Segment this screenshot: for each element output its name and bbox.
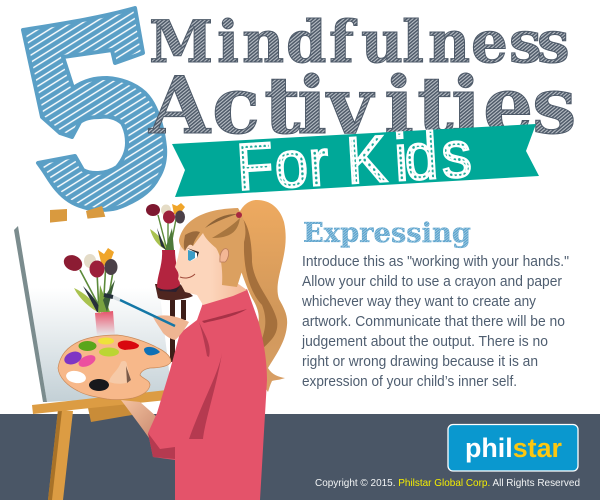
body text: artwork. Communicate that there will be no: [302, 314, 565, 330]
shirt: [148, 289, 267, 500]
paintbrush: [104, 295, 175, 326]
canvas on easel: [14, 212, 172, 402]
ear: [220, 249, 229, 262]
easel frame: [32, 390, 167, 500]
dark footer band: [0, 414, 600, 500]
logo: philstar: philstar: [465, 433, 562, 463]
body text: right or wrong drawing because it is an: [302, 354, 538, 370]
face and neck: [175, 230, 247, 305]
painted tulips on canvas: [61, 248, 118, 336]
big number 5: [23, 8, 165, 210]
copyright line: Copyright © 2015. Philstar Global Corp. All Rights Reserved: [315, 477, 580, 489]
logo: philstar: [448, 424, 578, 471]
painting hand: [153, 315, 189, 340]
side table: [155, 284, 193, 362]
ponytail: [238, 200, 287, 392]
title: Mindfulness: Mindfulness: [149, 8, 570, 76]
ribbon banner: For Kids: For Kids: [235, 118, 473, 205]
body text: whichever way they want to create any: [301, 294, 537, 310]
paint palette: [58, 335, 171, 400]
arm holding palette: [121, 400, 157, 438]
ribbon banner: For Kids: [172, 118, 539, 205]
body text: expression of your child’s inner self.: [302, 374, 517, 390]
heading: Expressing: Expressing: [303, 218, 471, 249]
easel pegs: [50, 206, 106, 223]
real vase with tulips: [146, 203, 185, 292]
body text: Allow your child to use a crayon and paper: [302, 274, 562, 290]
title: Activities: Activities: [148, 59, 576, 152]
eye: [187, 248, 199, 261]
mouth: [180, 274, 195, 278]
body text: Introduce this as "working with your hands.": [302, 254, 569, 270]
body text: [301, 254, 569, 390]
body text: judgement about the output. There is no: [301, 334, 548, 350]
hair on head: [179, 208, 245, 287]
